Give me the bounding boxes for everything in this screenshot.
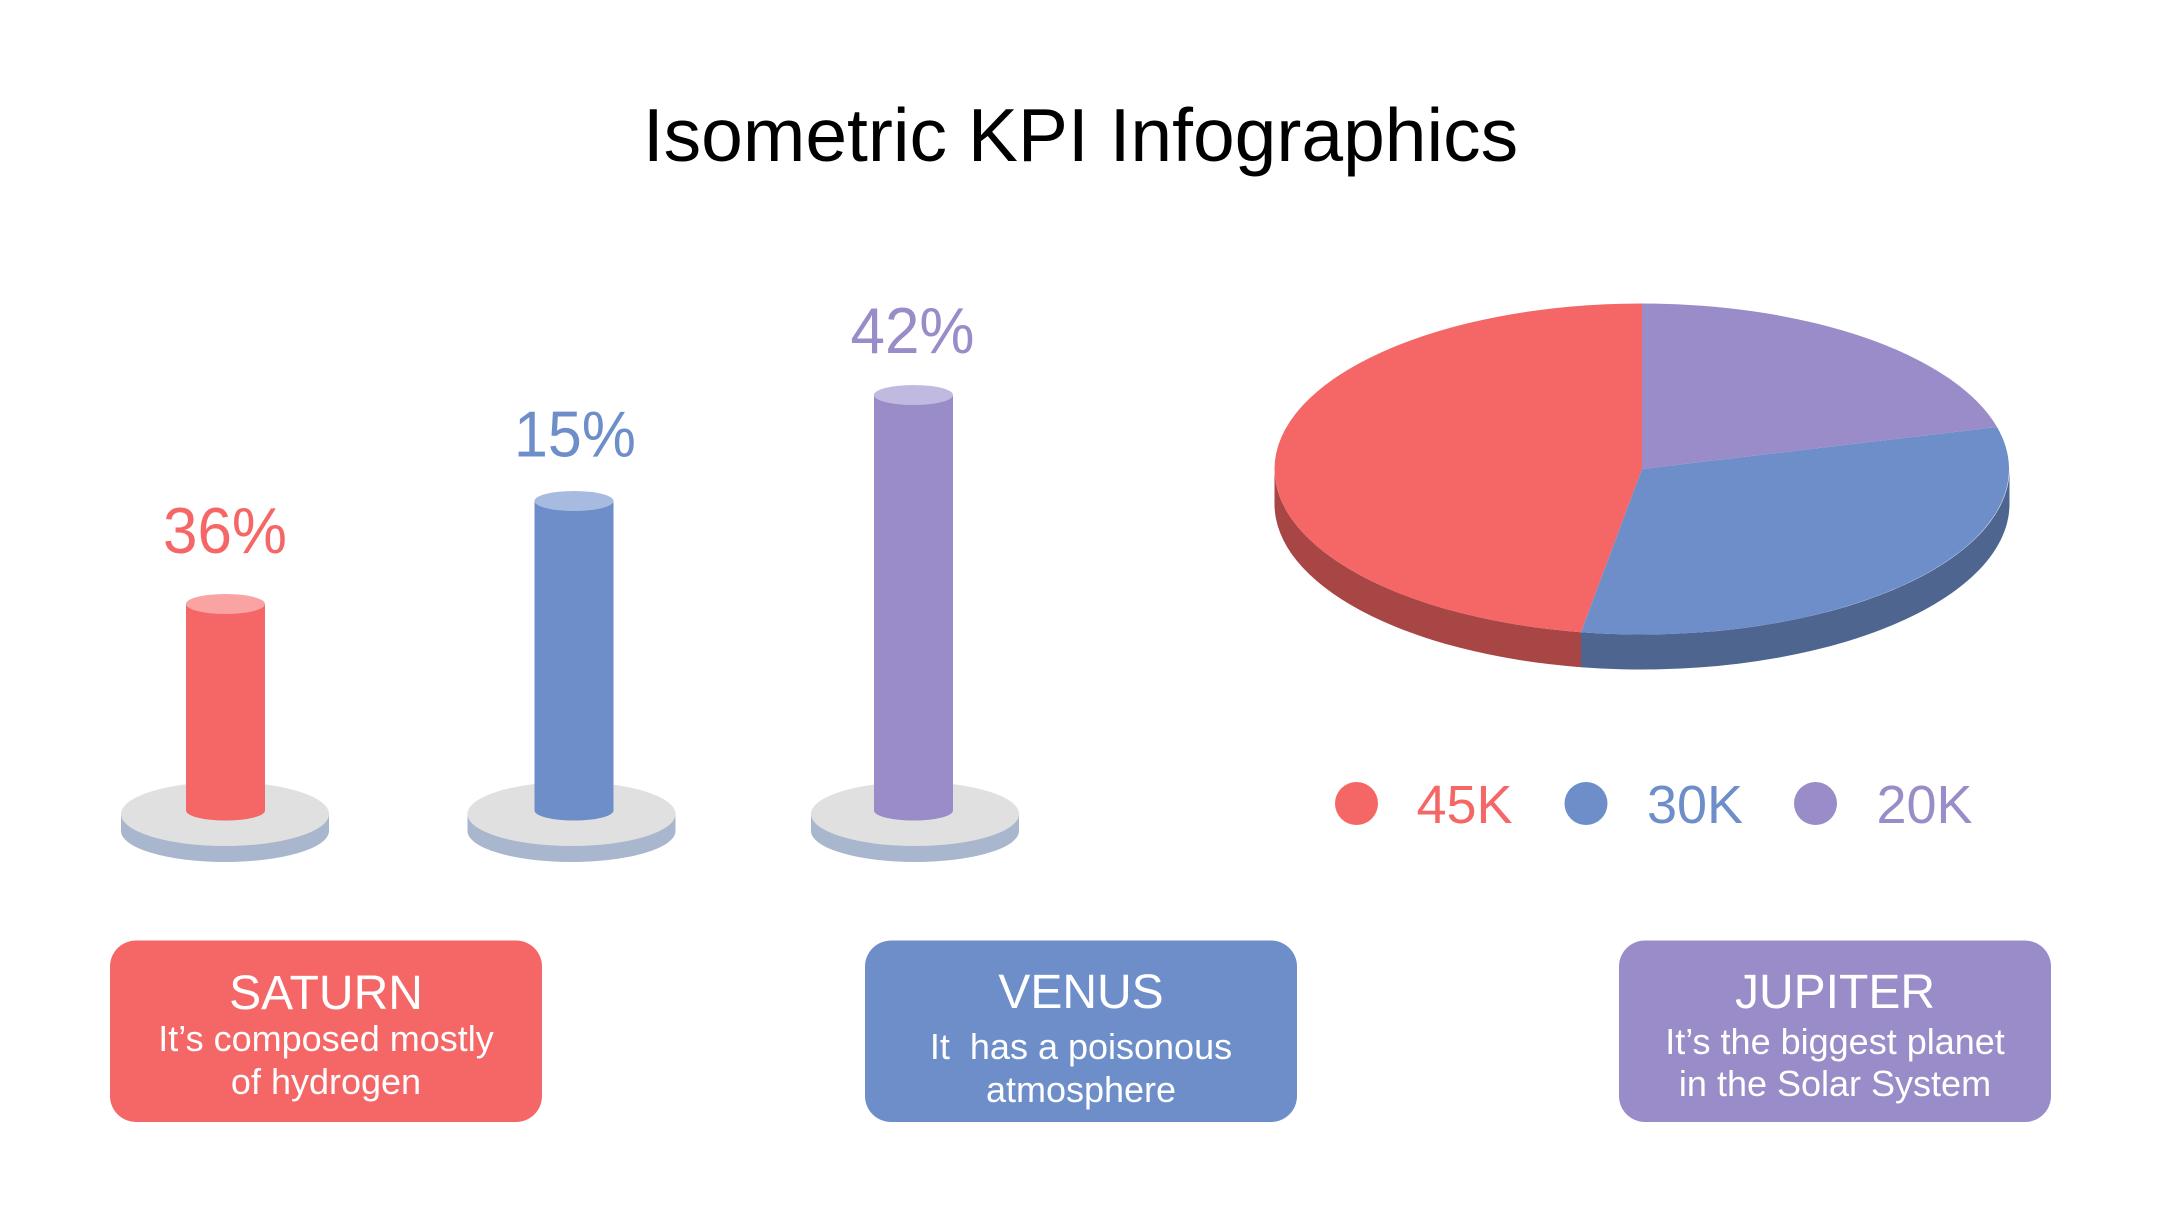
pie chart — [1274, 304, 2010, 669]
cylinder: Venus 15%: 15% — [514, 398, 636, 470]
card: Jupiter: in the Solar System — [1679, 1063, 1991, 1104]
title: Isometric KPI Infographics — [643, 93, 1518, 177]
card: Jupiter: JUPITER — [1735, 966, 1935, 1019]
card: Saturn: of hydrogen — [231, 1061, 421, 1102]
card: Venus: atmosphere — [986, 1069, 1176, 1110]
cylinder: Saturn 36%: 36% — [163, 494, 287, 567]
legend item: 45K: 45K — [1416, 775, 1513, 835]
cylinder: Saturn 36% — [121, 494, 329, 862]
cylinder: Jupiter 42%: 42% — [850, 294, 974, 367]
cylinder: Venus 15% — [468, 398, 676, 862]
legend — [1335, 775, 1973, 835]
legend item: 20K — [1794, 775, 1973, 835]
card: Venus: VENUS — [998, 966, 1164, 1019]
bar chart: cylinders — [121, 294, 1019, 862]
legend item: 45K — [1335, 775, 1513, 835]
card: Jupiter: It’s the biggest planet — [1665, 1021, 2005, 1062]
card: Venus: It has a poisonous — [930, 1026, 1232, 1067]
card: Saturn: It’s composed mostly — [158, 1018, 494, 1059]
card: Venus — [865, 940, 1297, 1122]
legend item: 20K: 20K — [1876, 775, 1973, 835]
legend item: 30K — [1564, 775, 1743, 835]
card: Saturn: SATURN — [229, 967, 423, 1020]
cylinder: Jupiter 42% — [811, 294, 1019, 862]
card: Saturn — [110, 940, 542, 1122]
legend item: 30K: 30K — [1647, 775, 1743, 835]
card: Jupiter — [1619, 940, 2051, 1122]
